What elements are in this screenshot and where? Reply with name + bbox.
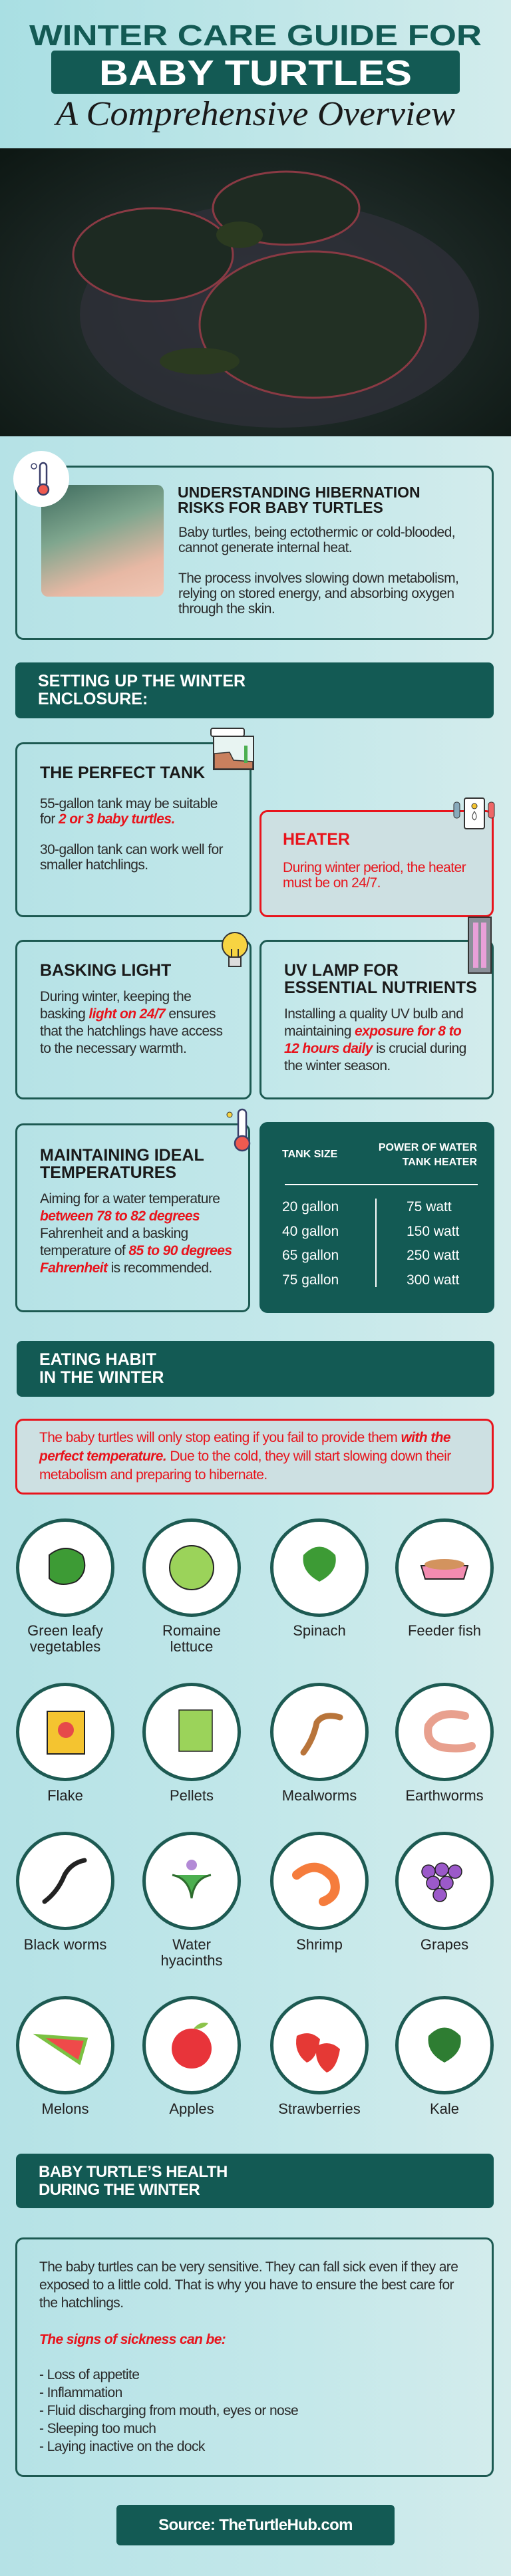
panel: heater	[259, 810, 494, 917]
section header: setting up: SETTING UP THE WINTER	[38, 672, 246, 690]
row 2	[16, 1683, 114, 1781]
food grid: Feeder fish	[408, 1622, 481, 1639]
icon: tank	[210, 728, 254, 770]
section header: eating habit: EATING HABIT	[39, 1350, 156, 1369]
section header: health	[16, 2154, 494, 2208]
table: tank heater power	[259, 1122, 494, 1313]
icon: thermometer circle	[13, 451, 69, 507]
food grid: Mealworms	[282, 1787, 357, 1804]
icon: bulb	[222, 932, 248, 967]
food grid: hyacinths	[161, 1952, 222, 1969]
heading: perfect tank: THE PERFECT TANK	[40, 764, 205, 782]
section header: setting up: ENCLOSURE:	[38, 690, 148, 708]
heading: uv lamp: ESSENTIAL NUTRIENTS	[284, 978, 477, 997]
table: tank heater power: 250 watt	[407, 1248, 459, 1263]
food grid: Grapes	[421, 1936, 468, 1953]
food grid: Strawberries	[278, 2100, 361, 2117]
title block	[0, 0, 511, 148]
text: hibernation body	[178, 525, 458, 617]
text: signs of sickness: The signs of sickness can be:	[39, 2332, 226, 2347]
heading: uv lamp: UV LAMP FOR	[284, 961, 399, 980]
list: symptoms: - Inflammation	[39, 2385, 122, 2400]
text: heater: During winter period, the heater must be on 24/7.	[283, 860, 466, 891]
heading: uv lamp	[284, 961, 477, 997]
heading: heater: HEATER	[283, 830, 350, 849]
text: tank: 55-gallon tank may be suitable for 2 or 3 baby turtles.	[40, 796, 218, 827]
list: symptoms: - Fluid discharging from mouth, eyes or nose	[39, 2403, 298, 2418]
text: uv lamp: Installing a quality UV bulb and maintaining exposure for 8 to 12 hours daily is crucial during the winter season.	[284, 1006, 466, 1073]
food grid: lettuce	[170, 1638, 213, 1655]
table: tank heater power: TANK SIZE	[282, 1149, 337, 1160]
text: tank	[40, 796, 224, 873]
list: symptoms	[39, 2367, 298, 2454]
panel: ideal temperatures	[15, 1123, 250, 1312]
table: tank heater power: 40 gallon	[282, 1224, 339, 1238]
table: tank heater power: 150 watt	[407, 1224, 459, 1238]
heading: temperatures	[40, 1146, 204, 1182]
photo: turtle on hand	[41, 485, 164, 597]
table: tank heater power: 300 watt	[407, 1272, 459, 1288]
icon: uv lamp	[468, 917, 492, 974]
table: tank heater power: 75 gallon	[282, 1272, 339, 1288]
source button	[116, 2505, 395, 2545]
food grid: Water	[172, 1936, 211, 1953]
panel: basking light	[15, 940, 252, 1099]
food grid: Pellets	[170, 1787, 214, 1804]
food grid: Melons	[42, 2100, 88, 2117]
list: symptoms: - Laying inactive on the dock	[39, 2439, 205, 2454]
text: health body: The baby turtles can be very sensitive. They can fall sick even if they are exposed to a little cold. That is why you have to ensure the best care for the hatchlings.	[39, 2259, 458, 2311]
heading: temperatures: TEMPERATURES	[40, 1163, 176, 1182]
heading: hibernation: UNDERSTANDING HIBERNATION RISKS FOR BABY TURTLES	[178, 484, 421, 516]
heading: temperatures: MAINTAINING IDEAL	[40, 1146, 204, 1165]
section header: eating habit: IN THE WINTER	[39, 1368, 164, 1387]
section header: setting up	[15, 662, 494, 718]
table: tank heater power: 20 gallon	[282, 1199, 339, 1215]
text: tank: 30-gallon tank can work well for smaller hatchlings.	[40, 842, 223, 873]
food grid: Shrimp	[296, 1936, 343, 1953]
food grid: Kale	[430, 2100, 459, 2117]
food grid: Apples	[169, 2100, 214, 2117]
food grid: Spinach	[293, 1622, 346, 1639]
food grid	[16, 1518, 494, 2117]
title line 1: WINTER CARE GUIDE FOR	[29, 19, 482, 52]
section header: health: DURING THE WINTER	[39, 2181, 200, 2199]
food grid: vegetables	[30, 1638, 100, 1655]
list: symptoms: - Loss of appetite	[39, 2367, 139, 2382]
icon: heater	[454, 797, 495, 829]
food grid: Romaine	[162, 1622, 221, 1639]
callout: eating: The baby turtles will only stop eating if you fail to provide them with the perfect temperature. Due to the cold, they will start slowing down their metabolism and preparing to hibernate.	[39, 1430, 451, 1483]
table: tank heater power: TANK HEATER	[403, 1157, 477, 1168]
table: tank heater power: 75 watt	[407, 1199, 452, 1215]
source button: Source: TheTurtleHub.com	[158, 2515, 353, 2534]
food grid: Green leafy	[27, 1622, 103, 1639]
hero photo: turtles on rock	[0, 148, 511, 436]
panel: health	[15, 2237, 494, 2477]
food grid: Flake	[47, 1787, 83, 1804]
title line 1: A Comprehensive Overview	[54, 95, 455, 133]
table: tank heater power: POWER OF WATER	[379, 1142, 477, 1153]
food grid: Black worms	[24, 1936, 106, 1953]
panel: perfect tank	[15, 742, 252, 917]
title line 1: BABY TURTLES	[99, 53, 412, 93]
text: hibernation body: The process involves slowing down metabolism, relying on stored energy, and absorbing oxygen through the skin.	[178, 571, 458, 617]
heading: basking: BASKING LIGHT	[40, 961, 171, 980]
text: hibernation body: Baby turtles, being ectothermic or cold-blooded, cannot generate internal heat.	[178, 525, 455, 555]
row 4	[16, 1996, 114, 2094]
text: basking: During winter, keeping the basking light on 24/7 ensures that the hatchlings have access to the necessary warmth.	[40, 989, 222, 1056]
title line 1	[29, 19, 482, 133]
table: tank heater power: 65 gallon	[282, 1248, 339, 1263]
food grid: Earthworms	[405, 1787, 484, 1804]
panel: uv lamp	[259, 940, 494, 1099]
section header: health: BABY TURTLE’S HEALTH	[39, 2163, 228, 2181]
text: temperatures: Aiming for a water temperature between 78 to 82 degrees Fahrenheit and a basking temperature of 85 to 90 degrees Fahrenheit is recommended.	[40, 1191, 232, 1276]
callout: eating	[15, 1419, 494, 1495]
row 1	[16, 1518, 114, 1617]
row 3	[16, 1832, 114, 1930]
panel: hibernation risks	[15, 466, 494, 640]
section header: eating habit	[17, 1341, 494, 1397]
icon: thermometer	[226, 1108, 250, 1152]
list: symptoms: - Sleeping too much	[39, 2421, 156, 2436]
